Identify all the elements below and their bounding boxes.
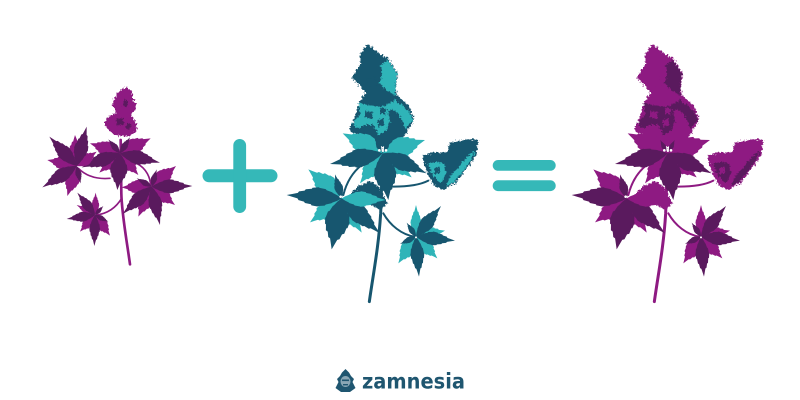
- teal leaf cluster: right: [392, 202, 456, 277]
- purple leaf cluster: left: [571, 161, 672, 252]
- teal top flower bud: [349, 44, 414, 147]
- small plant leaf cluster: left: [39, 125, 100, 198]
- small plant leaf cluster: top: [79, 131, 162, 191]
- purple side flower bud: [707, 139, 763, 190]
- small plant flower bud: [105, 87, 137, 137]
- small plant leaf cluster: bottom: [66, 190, 115, 246]
- plant: large purple offspring: [571, 44, 763, 302]
- icon: logo mask: [336, 369, 356, 392]
- plant: large teal parent: [286, 44, 478, 302]
- small plant leaf cluster: right: [118, 160, 192, 226]
- purple stem: [628, 153, 713, 302]
- teal side flower bud: [422, 139, 478, 190]
- logo wordmark: zamnesia: [362, 370, 465, 394]
- logo: Zamnesia: [336, 369, 465, 394]
- purple leaf cluster: right: [677, 202, 741, 277]
- icon: plus sign: [202, 139, 278, 213]
- teal leaf cluster: top: [328, 124, 430, 201]
- small plant stem: [78, 140, 151, 264]
- teal stem: [343, 153, 428, 302]
- purple top flower bud: [634, 44, 699, 147]
- plant: small purple parent: [39, 87, 192, 264]
- teal leaf cluster: left: [286, 161, 387, 252]
- purple leaf cluster: top: [613, 124, 715, 201]
- icon: equals sign: [493, 160, 556, 191]
